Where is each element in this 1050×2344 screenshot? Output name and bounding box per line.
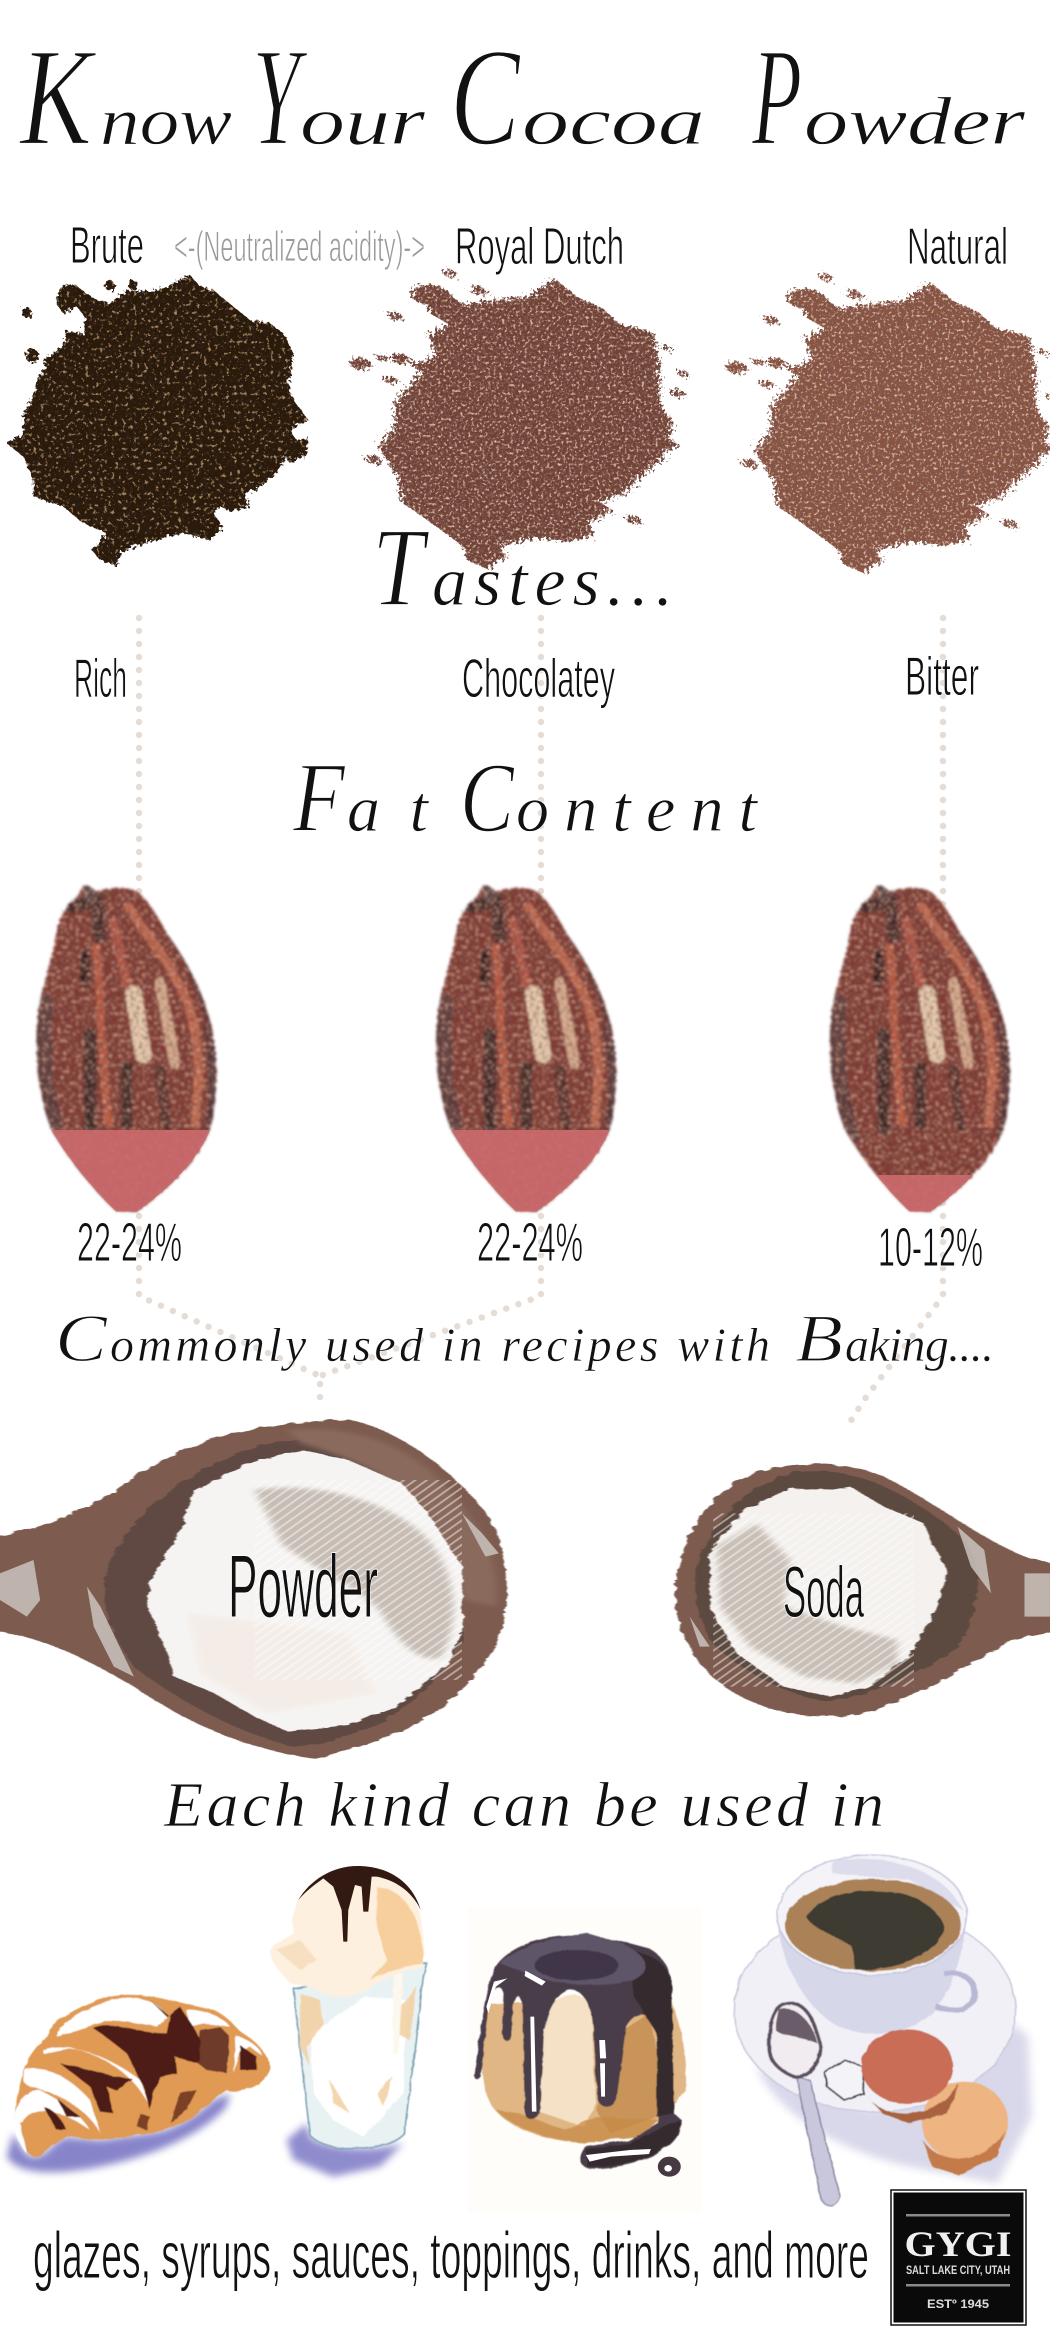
logo: Gygi: ESTº 1945	[927, 2297, 989, 2311]
food: ice cream glass	[270, 1866, 427, 2177]
heading: Fat Content: F	[292, 742, 346, 853]
powder pile: Royal Dutch	[350, 270, 688, 569]
logo: Gygi	[891, 2190, 1026, 2325]
heading: commonly used with baking: aking....	[845, 1319, 994, 1372]
title: our	[300, 83, 426, 159]
cocoa pod: Brute fat level	[34, 884, 219, 1214]
title: P	[751, 20, 802, 175]
taste: Chocolatey: Chocolatey	[462, 647, 615, 709]
cocoa pod: Natural fat level	[828, 884, 1012, 1214]
faint backdrop behind bundt	[468, 1907, 702, 2213]
heading: commonly used with baking	[55, 1300, 994, 1376]
heading: Fat Content	[292, 742, 759, 853]
heading: commonly used with baking: B	[795, 1300, 843, 1376]
spoon: baking powder: Powder	[228, 1536, 378, 1636]
fat percent: Royal Dutch: 22-24%	[477, 1211, 583, 1273]
logo: Gygi: SALT LAKE CITY, UTAH	[906, 2263, 1010, 2277]
spoon: baking soda: Soda	[783, 1553, 864, 1633]
cocoa pod: Royal Dutch fat level	[434, 884, 619, 1214]
label: Brute: Brute	[70, 217, 144, 275]
title: now	[100, 83, 232, 159]
label: neutralized acidity: <-(Neutralized acidity)->	[174, 223, 425, 271]
title: ocoa	[522, 83, 705, 159]
spoon: baking powder	[0, 1419, 507, 1758]
title: owder	[804, 83, 1026, 159]
heading: commonly used with baking: C	[55, 1300, 108, 1376]
dotted connector lines	[139, 618, 943, 1430]
heading: Fat Content: ontent	[516, 773, 759, 846]
title: C	[450, 20, 521, 175]
title	[18, 20, 1026, 175]
heading: commonly used with baking: ommonly used in recipes with	[110, 1319, 770, 1372]
powder pile: Brute	[7, 275, 308, 567]
heading: Tastes	[372, 506, 673, 630]
fat percent: Brute: 22-24%	[77, 1211, 182, 1273]
taste: Bitter: Bitter	[905, 645, 979, 707]
food: croissant	[7, 1995, 270, 2172]
heading: Fat Content: at	[347, 773, 430, 846]
heading: Tastes: T	[372, 506, 430, 630]
heading: Fat Content: C	[460, 742, 515, 853]
text: Rich	[74, 647, 127, 709]
label: Royal Dutch: Royal Dutch	[455, 218, 624, 276]
food: coffee with macarons	[734, 1855, 1032, 2206]
powder pile: Natural	[726, 274, 1050, 573]
title: K	[18, 20, 97, 175]
title: Y	[252, 20, 308, 175]
heading: each kind can be used in: Each kind can be used in	[163, 1769, 884, 1840]
food: chocolate glazed bundt	[474, 1933, 686, 2177]
logo: Gygi: GYGI	[904, 2224, 1012, 2264]
heading: Tastes: astes...	[432, 544, 673, 621]
spoon: baking soda	[675, 1464, 1050, 1716]
